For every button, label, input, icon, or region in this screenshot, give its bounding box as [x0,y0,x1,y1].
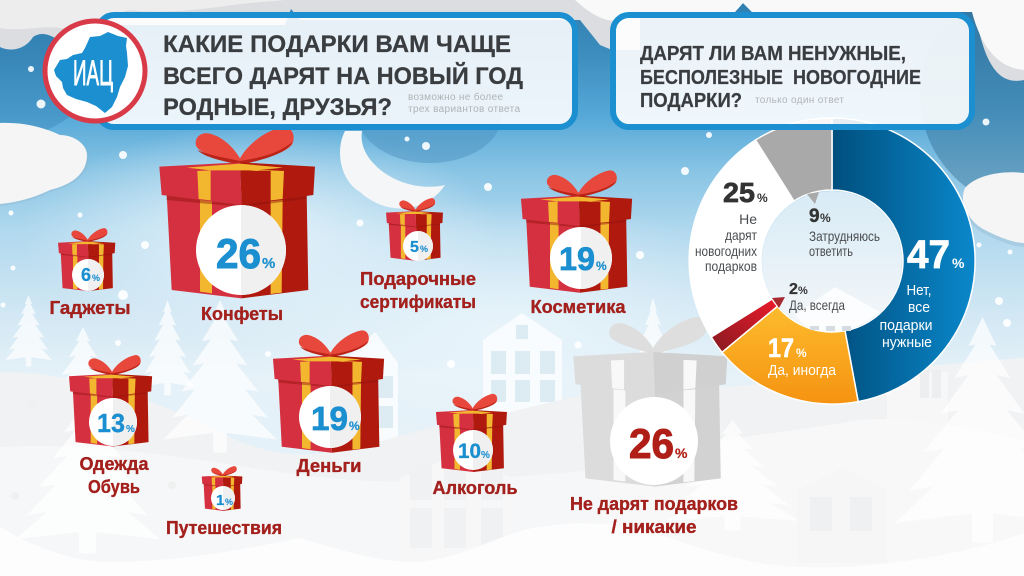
panel: right question [613,15,972,127]
donut label: 25%: дарят [725,227,757,243]
donut label: 17% [768,333,837,379]
background: trees back row [5,295,678,439]
donut label: 25%: новогодних [695,243,757,259]
donut label: 17%: 17 [768,333,794,363]
note: up to three answers: возможно не более [408,91,503,103]
gift: Гаджеты [50,228,130,318]
gift: Путешествия: Путешествия [166,518,282,538]
gift: Подарочные сертификаты: Подарочные [360,269,476,289]
gift: Косметика: % [596,259,607,273]
segment: 25% не дарят [689,140,794,337]
gift: Гаджеты: 6 [81,265,91,285]
gift: Подарочные сертификаты: сертификаты [360,292,476,312]
donut label: 25%: подарков [705,258,757,274]
gift: Конфеты: % [262,255,275,272]
gift: Алкоголь: 10 [458,440,481,463]
donut label: 47%: 47 [907,233,950,277]
heading: right question: БЕСПОЛЕЗНЫЕ НОВОГОДНИЕ [640,67,921,89]
donut label: 17%: % [796,346,807,360]
donut label: 47%: нужные [882,334,932,351]
heading: left question: ВСЕГО ДАРЯТ НА НОВЫЙ ГОД [163,62,523,90]
donut label: 2%: 2 [789,281,798,298]
gift: Не дарят подарков / никакие: 26 [629,420,674,467]
gift: Косметика: Косметика [530,297,626,317]
background: houses [345,313,562,445]
donut chart [689,118,975,404]
donut label: 47%: Нет, [906,282,932,299]
gift: Гаджеты: % [92,273,100,283]
gift: Не дарят подарков / никакие [570,317,738,537]
heading: right question: ПОДАРКИ? [640,90,742,112]
donut label: 17%: Да, иногда [768,362,837,379]
gift: Гаджеты: Гаджеты [50,298,130,318]
heading: left question [163,31,523,121]
pointer: 2% [772,297,785,308]
donut label: 9% [809,206,880,259]
donut label: 25%: Не [739,211,757,227]
donut label: 25%: 25 [723,177,755,208]
donut label: 47%: подарки [880,317,932,334]
donut label: 9%: ответить [809,243,853,259]
segment: 9% затрудняюсь [756,118,832,201]
panel: left question [98,15,575,127]
gift: Алкоголь: Алкоголь [432,478,518,498]
donut label: 25% [695,177,768,274]
donut label: 2%: % [798,285,808,297]
note: up to three answers [408,91,520,115]
heading: left question: КАКИЕ ПОДАРКИ ВАМ ЧАЩЕ [163,31,511,58]
gift: Косметика: 19 [559,241,595,277]
gift: Путешествия: 1 [216,492,224,509]
segment: 47% нет [832,118,975,402]
gift: Путешествия [166,466,282,538]
gift: Не дарят подарков / никакие: % [675,445,688,461]
note: one answer only: только один ответ [755,95,844,106]
gift: Путешествия: % [225,497,233,507]
gift: Одежда, Обувь: % [126,424,135,435]
donut centre [762,191,902,331]
donut label: 47% [880,233,965,351]
donut label: 2%: Да, всегда [789,297,845,313]
gift: Алкоголь [432,394,518,498]
gift: Не дарят подарков / никакие: / никакие [612,517,696,537]
background: paper clouds [0,0,1024,247]
background: snowflakes [0,66,1012,500]
heading: left question: РОДНЫЕ, ДРУЗЬЯ? [163,94,392,121]
gift: Конфеты [159,127,315,324]
gift: Одежда, Обувь: 13 [97,408,125,438]
gift: Деньги [273,330,384,476]
gift: Деньги: 19 [311,400,348,437]
donut label: 47%: все [908,299,930,316]
gift: Подарочные сертификаты: % [420,244,428,254]
background: crescent moon [340,131,445,208]
donut label: 2% [789,281,845,313]
donut label: 25%: % [757,191,768,205]
gift: Косметика [521,170,632,317]
segment: 17% да, иногда [722,306,858,404]
gift: Конфеты: Конфеты [201,304,283,324]
donut label: 47%: % [952,255,965,271]
logo: ИАЦ: ИАЦ [73,54,113,93]
donut label: 9%: 9 [809,206,820,227]
gift: Деньги: Деньги [296,456,362,476]
segment: 2% да, всегда [711,299,777,352]
heading: right question: ДАРЯТ ЛИ ВАМ НЕНУЖНЫЕ, [640,43,906,65]
logo: ИАЦ [45,21,145,121]
heading: right question [640,43,921,112]
donut label: 9%: Затрудняюсь [809,228,880,244]
pointer: 9% [807,192,819,204]
gift: Не дарят подарков / никакие: Не дарят подарков [570,494,738,514]
gift: Алкоголь: % [481,450,490,461]
gift: Одежда, Обувь [69,355,152,497]
gift: Конфеты: 26 [216,230,261,277]
gift: Одежда, Обувь: Обувь [88,477,140,497]
donut label: 9%: % [820,211,831,225]
gift: Подарочные сертификаты: 5 [410,239,419,256]
gift: Деньги: % [349,419,360,433]
gift: Подарочные сертификаты [360,198,476,312]
gift: Одежда, Обувь: Одежда [80,454,149,474]
background: snow hills [0,300,1024,576]
note: up to three answers: трех вариантов ответа [408,104,520,115]
